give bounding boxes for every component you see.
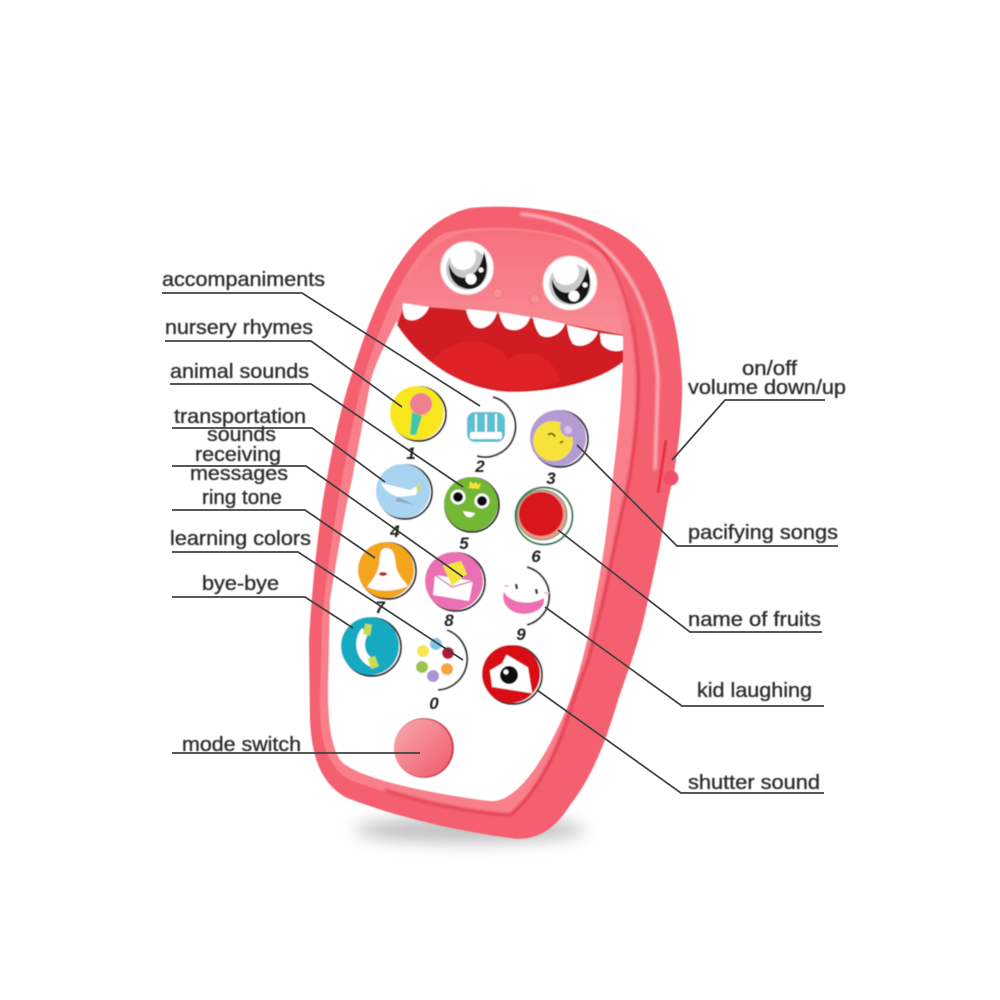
drop shadow under phone	[355, 817, 585, 843]
line: shutter sound	[537, 690, 824, 793]
button 6: watermelon	[516, 488, 572, 544]
labels	[162, 269, 846, 794]
button 5: frog	[444, 477, 499, 532]
line: animal sounds	[170, 384, 463, 487]
screen	[328, 322, 623, 801]
number 8: 8	[444, 611, 454, 630]
button 3: moon	[530, 410, 588, 467]
right eye	[543, 256, 597, 310]
button 8: envelope	[425, 552, 485, 611]
line: transportation sounds	[172, 428, 385, 482]
line: mode switch	[172, 752, 420, 754]
button 7: bell	[358, 542, 416, 599]
label: transportation: transportation	[174, 406, 306, 428]
label: receiving: receiving	[195, 444, 281, 466]
number 3: 3	[546, 469, 556, 488]
number 9: 9	[516, 625, 526, 644]
mode switch button	[394, 718, 454, 778]
mouth	[397, 306, 623, 392]
button 2: piano	[458, 397, 516, 457]
callout lines	[162, 293, 838, 793]
label: mode switch: mode switch	[182, 734, 301, 756]
line: pacifying songs	[577, 445, 838, 546]
button 9: laughing face	[501, 567, 559, 625]
nostril bumps	[493, 288, 540, 304]
line: accompaniments	[162, 293, 480, 406]
line: ring tone	[172, 510, 375, 558]
button 4: airplane	[376, 464, 432, 519]
line: learning colors	[172, 552, 463, 660]
number 4: 4	[389, 522, 400, 541]
label: volume down/up: volume down/up	[688, 377, 846, 399]
label: learning colors: learning colors	[170, 528, 311, 550]
button 1: microphone	[390, 386, 446, 441]
phone outer body	[309, 207, 682, 839]
number 7: 7	[375, 598, 386, 617]
tongue	[432, 341, 560, 391]
number 5: 5	[459, 534, 469, 553]
dark red ring line	[385, 240, 638, 815]
key numbers	[375, 444, 556, 713]
face panel	[396, 230, 623, 345]
line: nursery rhymes	[165, 341, 402, 407]
label: messages: messages	[190, 463, 288, 485]
number 6: 6	[531, 547, 541, 566]
line: name of fruits	[558, 530, 822, 632]
line: bye-bye	[172, 597, 353, 628]
lighter inner band	[320, 228, 638, 815]
button: camera	[482, 645, 542, 704]
line: receiving messages	[172, 466, 463, 577]
number 2: 2	[474, 457, 485, 476]
label: ring tone: ring tone	[202, 487, 282, 509]
label: pacifying songs: pacifying songs	[688, 522, 838, 544]
label: kid laughing: kid laughing	[697, 680, 812, 702]
label: accompaniments: accompaniments	[162, 269, 325, 291]
label: name of fruits: name of fruits	[688, 609, 821, 631]
label: animal sounds: animal sounds	[170, 361, 309, 383]
label: sounds: sounds	[207, 424, 276, 446]
line: kid laughing	[545, 607, 824, 706]
label: shutter sound: shutter sound	[688, 772, 820, 794]
teeth	[403, 303, 623, 351]
button 0: color dots	[413, 630, 471, 690]
button: phone handset	[341, 617, 401, 676]
label: nursery rhymes: nursery rhymes	[165, 317, 313, 339]
line: on/off volume	[672, 400, 825, 460]
white highlight strip	[520, 214, 658, 470]
side button	[658, 440, 678, 493]
label: bye-bye: bye-bye	[202, 573, 279, 595]
label: on/off: on/off	[742, 358, 797, 380]
number 0: 0	[429, 694, 439, 713]
number 1: 1	[406, 444, 416, 463]
phone illustration	[309, 207, 682, 839]
left eye	[440, 242, 494, 294]
